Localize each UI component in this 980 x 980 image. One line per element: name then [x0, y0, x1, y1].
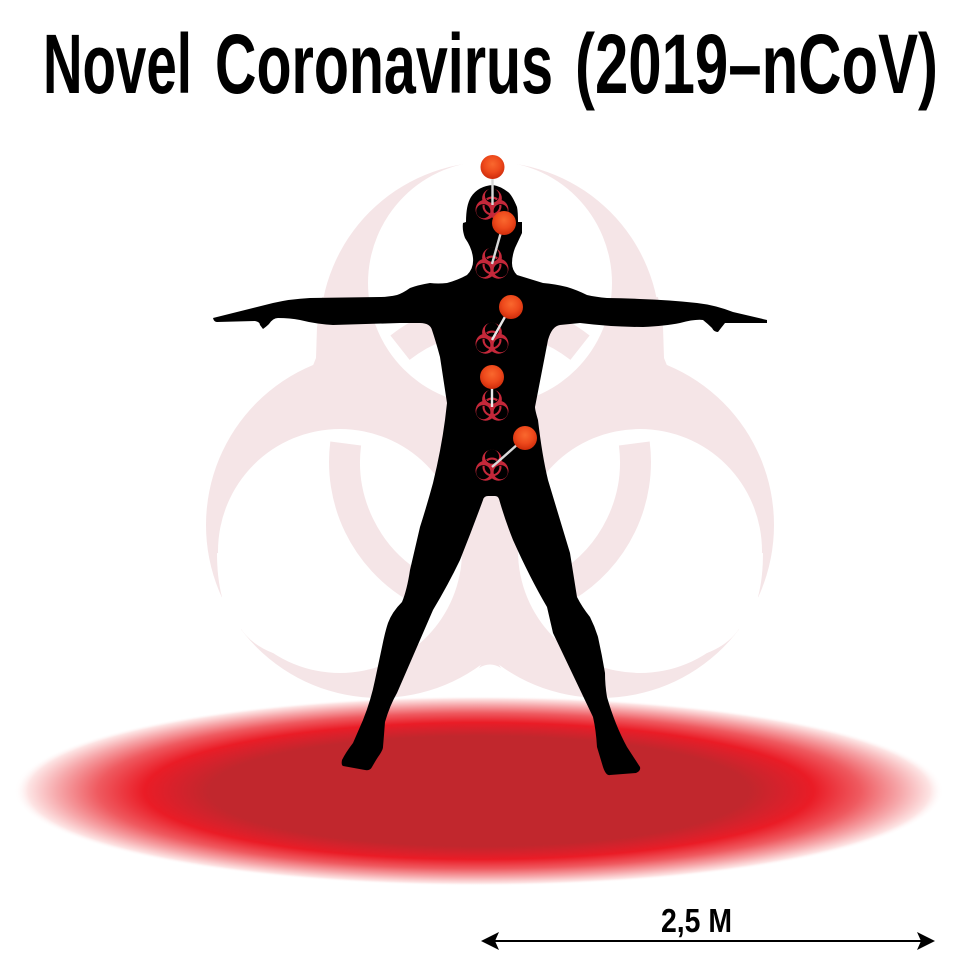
pin: stomach	[480, 365, 504, 407]
title: Novel	[43, 17, 192, 111]
small biohazard icon: stomach	[476, 390, 508, 421]
title	[43, 17, 938, 111]
small biohazard icon: throat	[476, 248, 508, 279]
background biohazard symbol	[200, 150, 780, 698]
double-headed distance arrow	[481, 932, 935, 950]
small biohazard icon: chest	[476, 323, 508, 354]
pin: throat	[492, 211, 516, 264]
red contamination zone on floor	[14, 696, 944, 886]
human silhouette	[213, 185, 767, 775]
small biohazard icon: head	[476, 189, 508, 220]
pin: head	[480, 155, 504, 205]
title: Coronavirus	[215, 17, 553, 111]
pin: lower abdomen	[492, 426, 537, 467]
small biohazard icon: lower abdomen	[476, 450, 508, 481]
pin: chest	[492, 295, 523, 340]
distance label: 2,5 M	[661, 902, 732, 939]
